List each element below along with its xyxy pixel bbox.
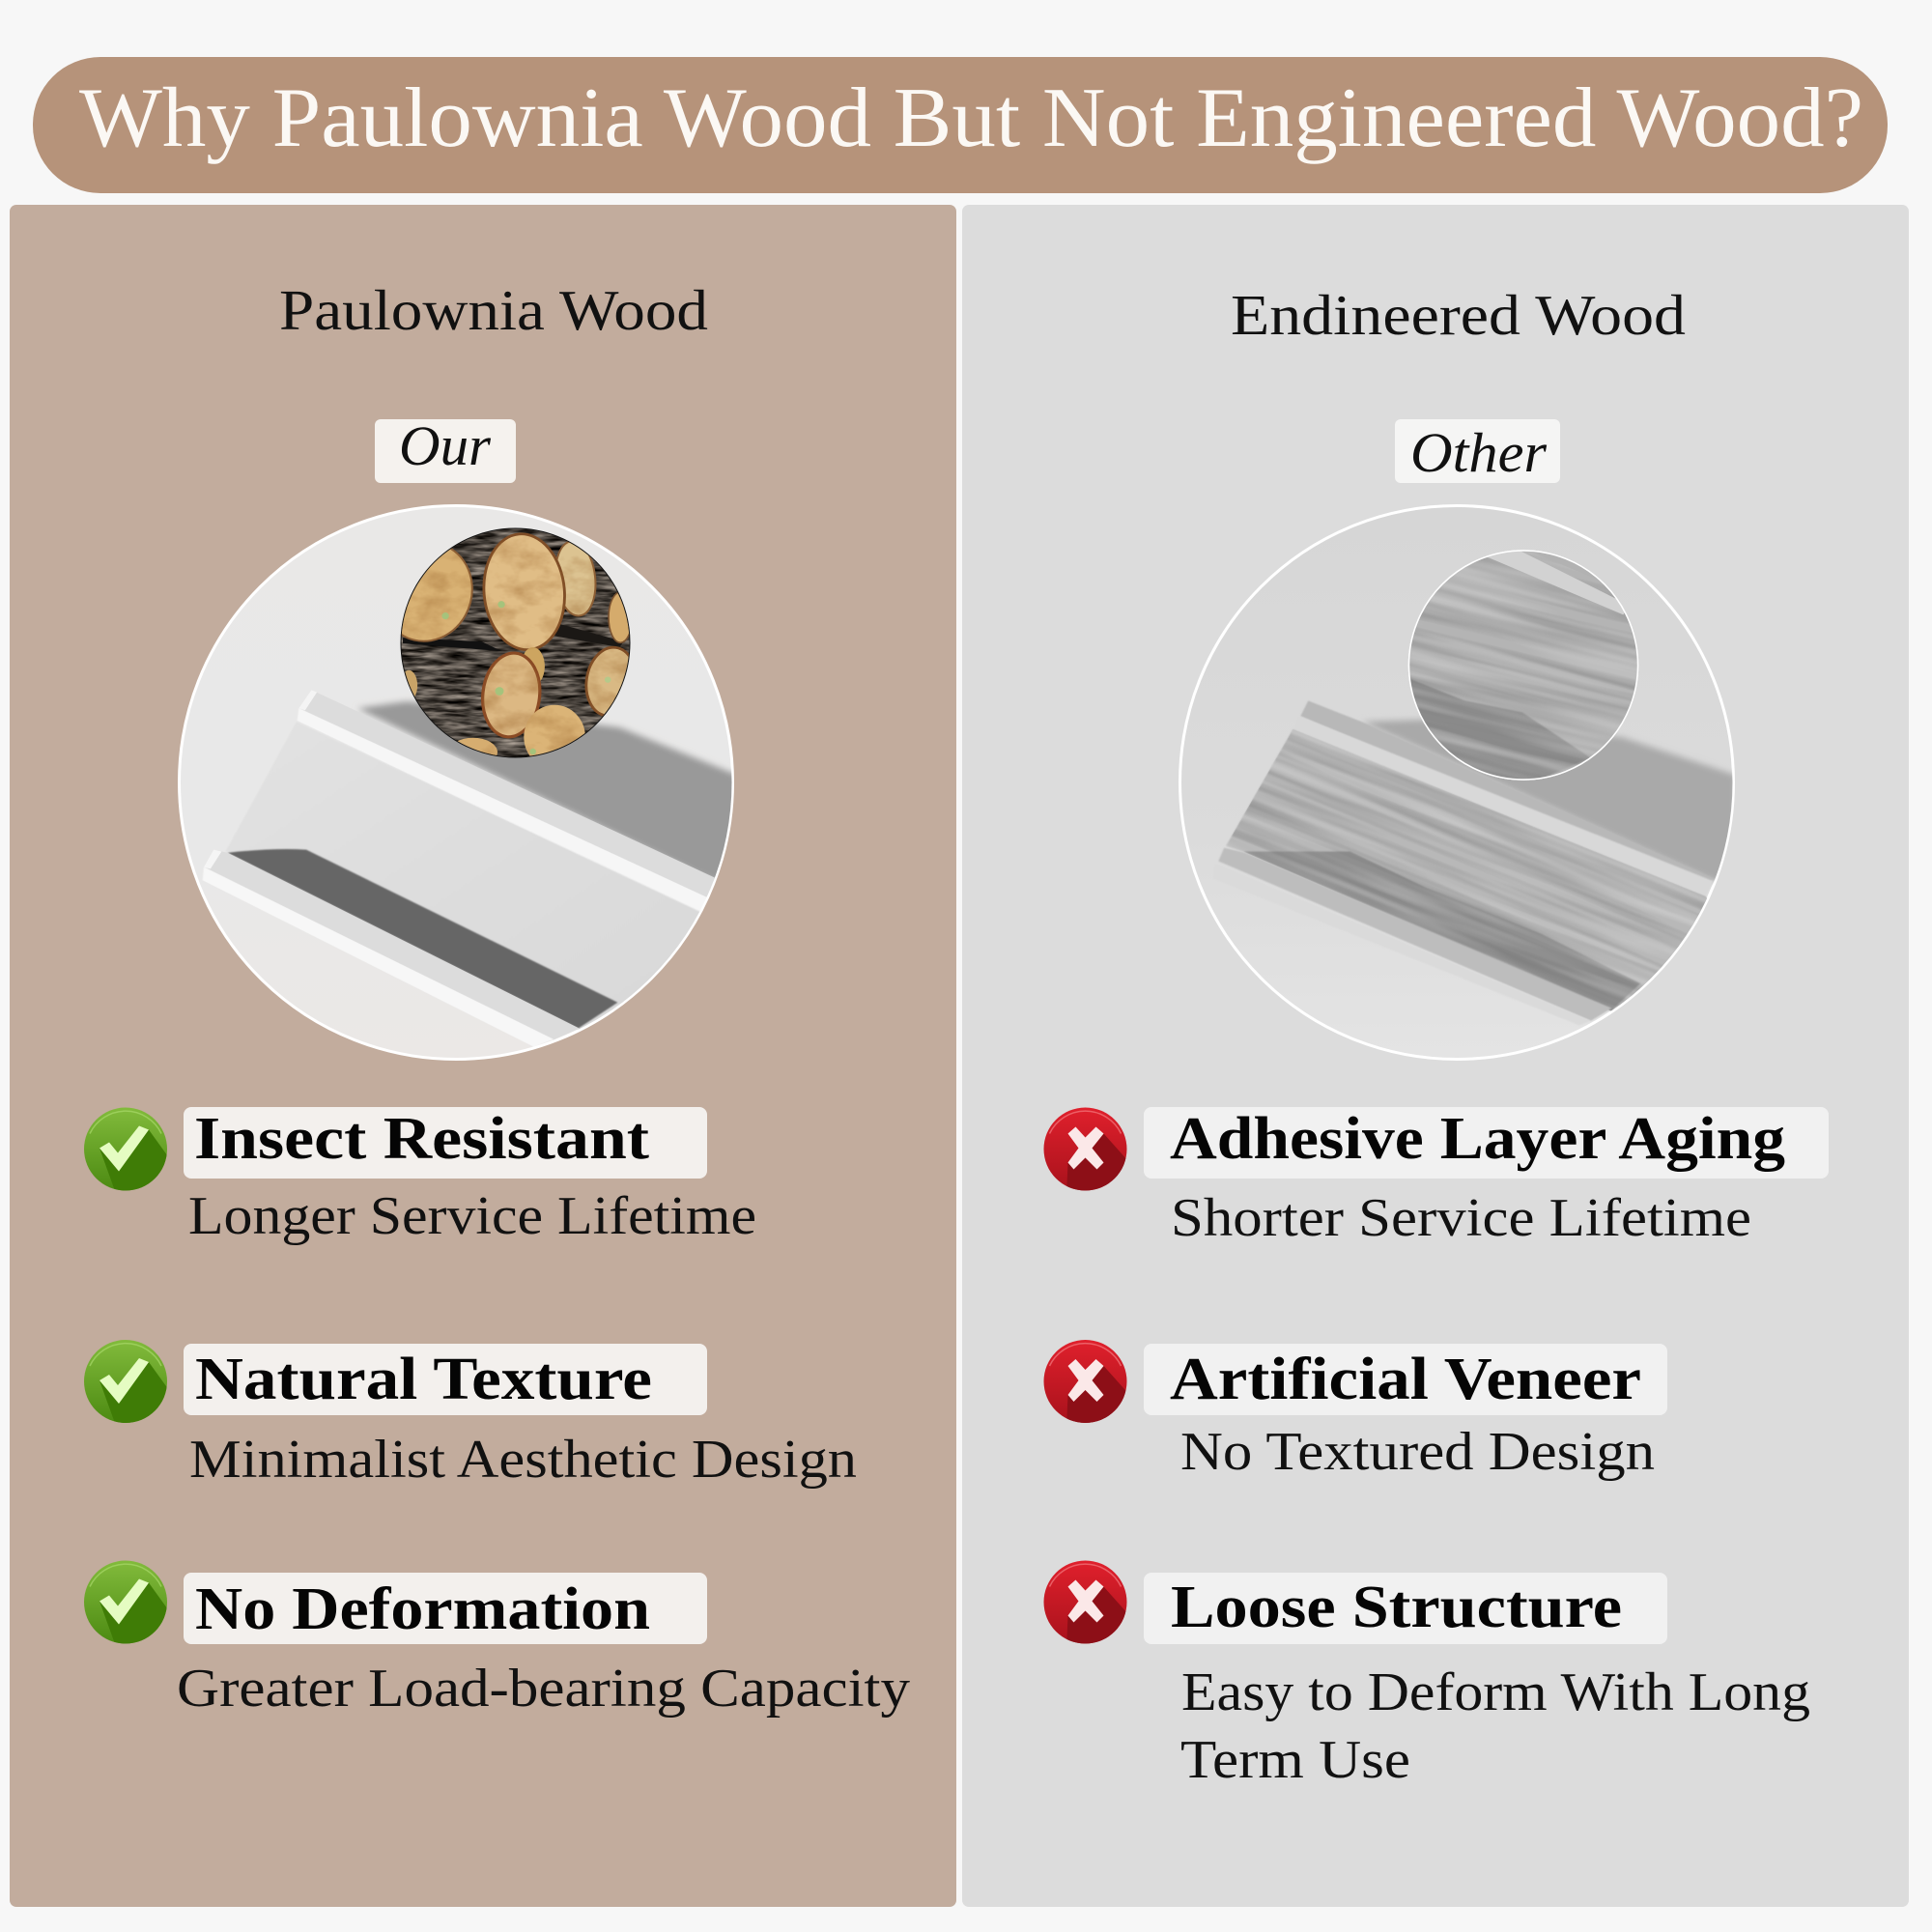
pill bbox=[184, 1344, 707, 1415]
tag: our bbox=[375, 414, 516, 483]
back panel bbox=[228, 734, 699, 1030]
item: natural texture bbox=[84, 1340, 857, 1490]
item description: No Textured Design bbox=[1180, 1422, 1655, 1482]
pill bbox=[1144, 1344, 1667, 1415]
icon: check bbox=[84, 1561, 184, 1660]
log ends bbox=[556, 541, 597, 616]
icon: cross bbox=[1043, 1340, 1144, 1439]
upper lip bbox=[1300, 700, 1713, 888]
icon: check bbox=[84, 1107, 184, 1208]
main board bbox=[1226, 729, 1708, 1011]
panel: engineered wood bbox=[962, 205, 1909, 1907]
item: adhesive layer aging bbox=[1043, 1106, 1829, 1248]
title banner bbox=[33, 57, 1888, 193]
shelf shadow bbox=[1362, 720, 1736, 884]
item description bbox=[1180, 1662, 1810, 1790]
item heading: Artificial Veneer bbox=[1170, 1347, 1641, 1412]
tag: our: Our bbox=[399, 414, 491, 477]
lower lip bbox=[1218, 848, 1612, 1021]
pill bbox=[1144, 1107, 1829, 1179]
tag: other: Other bbox=[1410, 421, 1547, 484]
lower lip bbox=[205, 850, 580, 1039]
circle: white shelf photo bbox=[180, 506, 769, 1079]
inset: paulownia logs bbox=[400, 527, 630, 757]
item heading: Insect Resistant bbox=[194, 1106, 649, 1172]
pill bbox=[184, 1107, 707, 1179]
item description: Greater Load-bearing Capacity bbox=[177, 1659, 910, 1719]
item: insect resistant bbox=[84, 1106, 756, 1246]
heading: engineered wood: Endineered Wood bbox=[1231, 283, 1686, 347]
icon: cross bbox=[1043, 1107, 1144, 1208]
item description: Term Use bbox=[1180, 1730, 1410, 1790]
item: no deformation bbox=[84, 1561, 910, 1719]
end-grain texture bbox=[402, 540, 628, 755]
item description: Shorter Service Lifetime bbox=[1171, 1188, 1751, 1248]
item heading: No Deformation bbox=[195, 1577, 650, 1642]
pill bbox=[184, 1573, 707, 1644]
circle: engineered shelf photo bbox=[1179, 504, 1735, 1061]
item heading: Adhesive Layer Aging bbox=[1170, 1106, 1785, 1172]
item description: Easy to Deform With Long bbox=[1181, 1662, 1810, 1722]
panel: paulownia wood bbox=[10, 205, 956, 1907]
item heading: Natural Texture bbox=[195, 1347, 652, 1412]
item: artificial veneer bbox=[1043, 1340, 1667, 1482]
item heading: Loose Structure bbox=[1171, 1575, 1622, 1640]
lichen spots bbox=[497, 601, 505, 608]
shelf shadow, upper bbox=[357, 701, 738, 884]
inset: engineered wood texture bbox=[1408, 550, 1638, 781]
item description: Longer Service Lifetime bbox=[188, 1186, 756, 1246]
item: loose structure bbox=[1043, 1561, 1810, 1790]
bark bbox=[399, 525, 636, 762]
title banner: Why Paulownia Wood But Not Engineered Wood? bbox=[79, 71, 1863, 165]
heading: paulownia wood: Paulownia Wood bbox=[279, 278, 708, 342]
icon: cross bbox=[1043, 1561, 1144, 1660]
upper lip bbox=[299, 690, 716, 897]
item description: Minimalist Aesthetic Design bbox=[189, 1430, 857, 1490]
lower shadow bbox=[227, 849, 617, 1029]
pill bbox=[1144, 1573, 1667, 1644]
icon: check bbox=[84, 1340, 184, 1439]
